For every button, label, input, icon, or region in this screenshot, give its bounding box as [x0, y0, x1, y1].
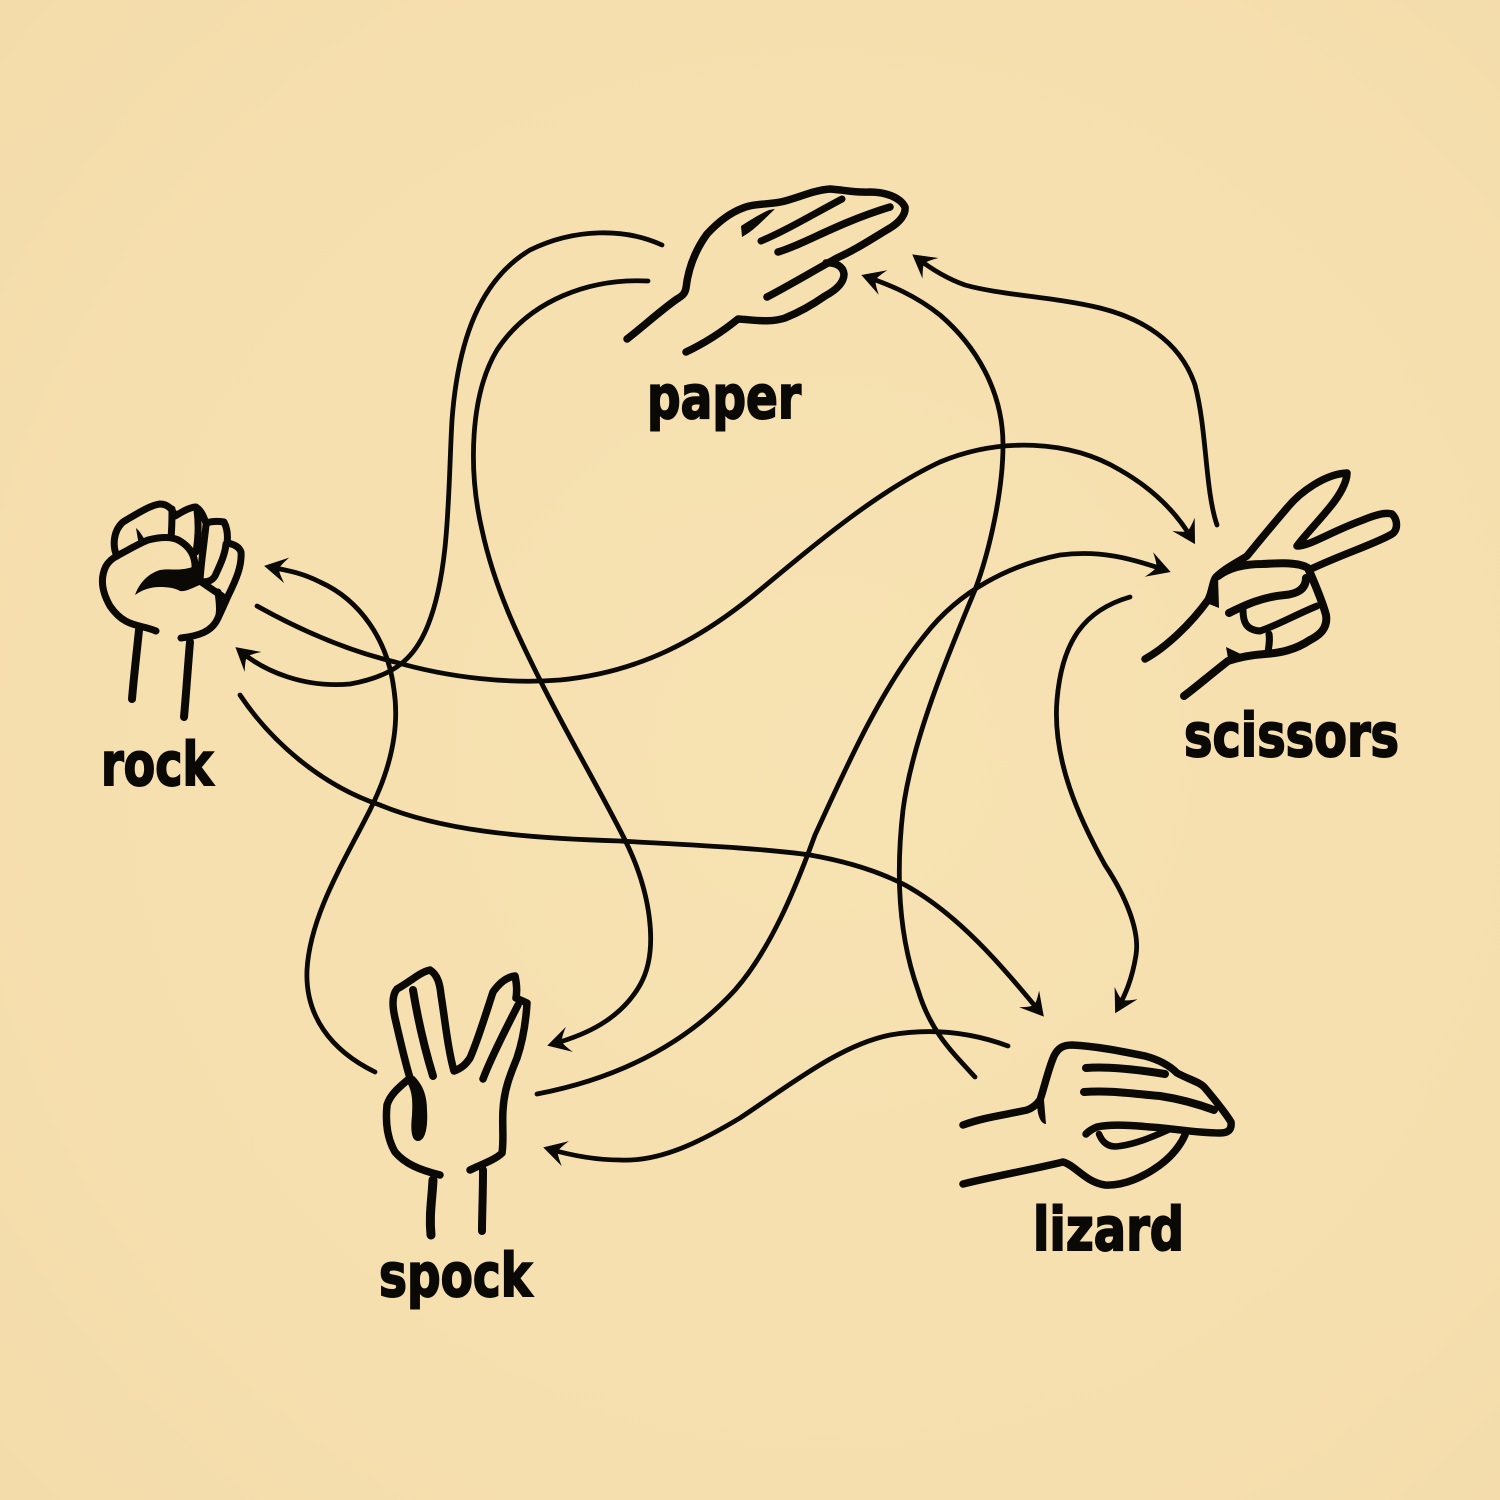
label: scissors: scissors	[1184, 701, 1399, 771]
arrow: paper to rock	[240, 233, 662, 685]
arrow: scissors to paper	[917, 258, 1217, 525]
icon: scissors hand	[1145, 473, 1396, 696]
label: paper: paper	[647, 363, 801, 433]
arrow: lizard to paper	[867, 277, 1003, 1077]
arrow: paper to spock	[473, 281, 651, 1044]
label: lizard: lizard	[1033, 1195, 1184, 1265]
arrow: rock to lizard	[240, 695, 1040, 1012]
arrow: spock to rock	[270, 567, 396, 1072]
arrow: lizard to spock	[549, 1032, 1008, 1160]
icon: paper hand	[627, 189, 905, 352]
arrow: spock to scissors	[537, 553, 1165, 1094]
icon: rock fist	[103, 504, 241, 717]
label: rock: rock	[101, 730, 215, 800]
label: spock: spock	[379, 1241, 534, 1311]
arrow: scissors to lizard	[1056, 597, 1137, 1008]
icon: lizard hand	[963, 1045, 1231, 1185]
icon: spock hand	[386, 970, 527, 1235]
arrow: rock to scissors	[257, 445, 1192, 681]
